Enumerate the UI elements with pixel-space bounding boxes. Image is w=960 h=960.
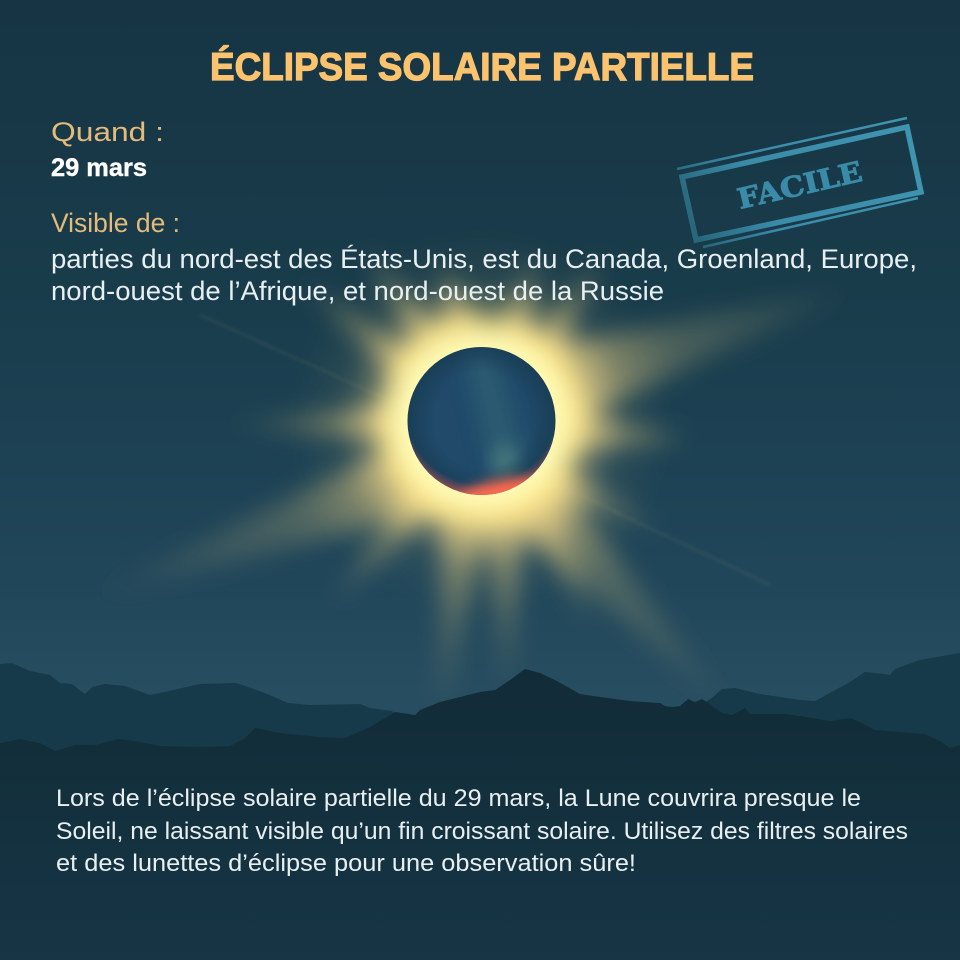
thin ray upper left — [200, 315, 400, 405]
title: ÉCLIPSE SOLAIRE PARTIELLE — [210, 45, 754, 89]
description text — [56, 785, 908, 877]
description text: Lors de l’éclipse solaire partielle du 29 mars, la Lune couvrira presque le — [56, 785, 861, 812]
description text: Soleil, ne laissant visible qu’un fin croissant solaire. Utilisez des filtres solaires — [56, 818, 908, 845]
stamp: difficulty FACILE — [677, 118, 921, 247]
date: 29 mars: 29 mars — [51, 154, 147, 182]
visibility regions text: nord-ouest de l’Afrique, et nord-ouest de la Russie — [51, 276, 664, 306]
front mountain range — [0, 669, 960, 960]
stamp: difficulty FACILE: FACILE — [734, 155, 865, 216]
label: Quand: Quand : — [51, 117, 164, 147]
thin ray lower right — [580, 495, 770, 585]
moon disc — [408, 347, 556, 495]
description text: et des lunettes d’éclipse pour une observation sûre! — [56, 850, 636, 877]
visibility regions text: parties du nord-est des États-Unis, est du Canada, Groenland, Europe, — [51, 244, 917, 274]
label: Visible de: Visible de : — [51, 208, 180, 238]
back mountain range — [0, 653, 960, 770]
visibility regions text — [51, 244, 917, 306]
corona halo — [291, 231, 671, 611]
corona rays — [70, 231, 850, 710]
